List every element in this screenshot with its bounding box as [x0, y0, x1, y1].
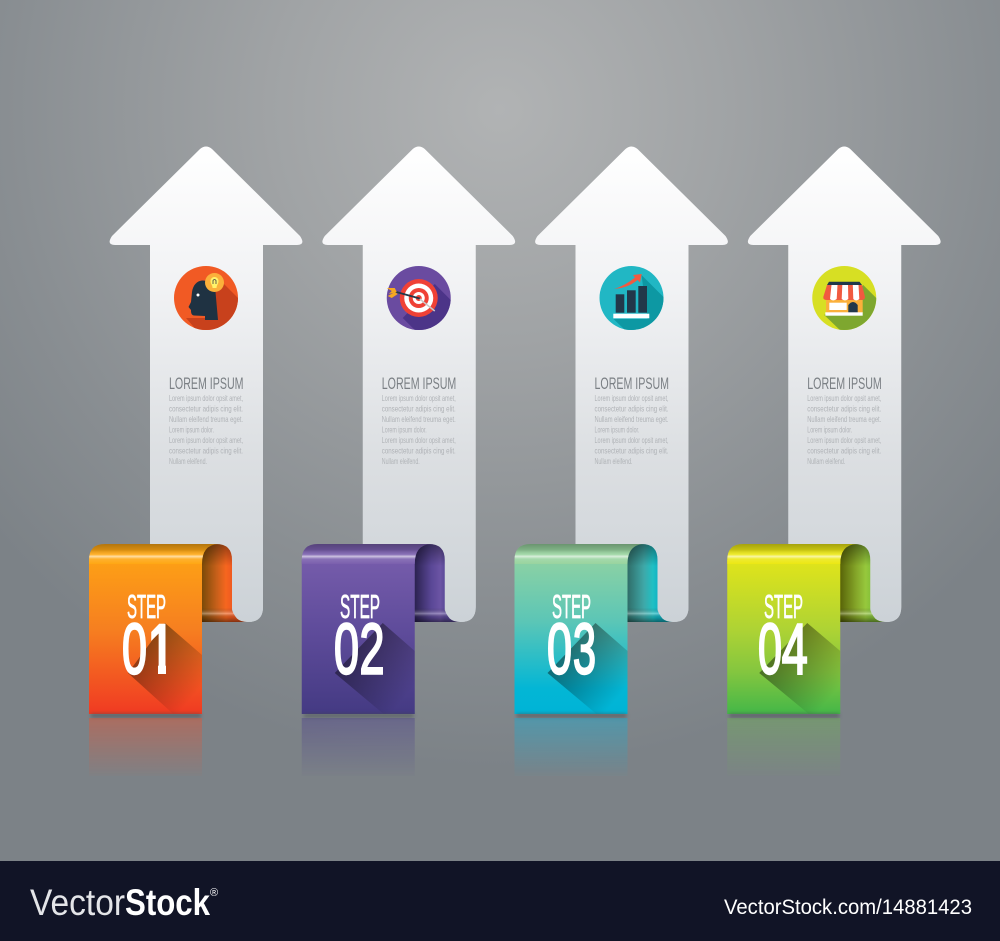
body text: consectetur adipis cing elit. [807, 446, 881, 456]
body text: Lorem ipsum dolor. [594, 424, 640, 434]
step 4 column: STEP [764, 588, 803, 625]
ribbon front [89, 544, 218, 714]
body text: Nullam eleifend treuma eget. [594, 414, 668, 424]
body text: consectetur adipis cing elit. [382, 446, 456, 456]
ribbon front [727, 544, 856, 714]
step number: 1 [148, 610, 174, 690]
heading: LOREM IPSUM [594, 374, 669, 393]
ribbon back fold [828, 544, 901, 622]
arrow 4 [748, 146, 941, 622]
number long shadow [335, 623, 414, 710]
body text: Nullam eleifend treuma eget. [807, 414, 881, 424]
reflection [514, 718, 628, 768]
footer bar [0, 861, 1000, 941]
step number: 0 [547, 610, 572, 690]
heading: LOREM IPSUM [169, 374, 244, 393]
step 3 column: STEP [552, 588, 591, 625]
reflection [89, 718, 202, 769]
ribbon front [514, 544, 644, 714]
arrow 1 [110, 146, 302, 622]
step 4 column [727, 146, 941, 776]
body text: consectetur adipis cing elit. [807, 404, 881, 414]
reflection [727, 718, 840, 756]
body text: Lorem ipsum dolor. [169, 424, 214, 434]
step 1 column [89, 146, 302, 776]
heading: LOREM IPSUM [382, 374, 456, 393]
footer logo: VectorStock [30, 882, 210, 923]
step number: 3 [573, 610, 596, 690]
icon: shop storefront [812, 266, 876, 330]
body text: Lorem ipsum dolor. [807, 424, 852, 434]
body text: Nullam eleifend treuma eget. [169, 414, 243, 424]
ribbon shadow [516, 714, 626, 718]
body text [382, 393, 456, 466]
step 3 column [514, 146, 728, 776]
heading: LOREM IPSUM [807, 374, 882, 393]
body text: Lorem ipsum dolor opsit amet, [382, 435, 456, 445]
ribbon shadow [304, 714, 414, 718]
ribbon shadow [729, 714, 839, 718]
body text: consectetur adipis cing elit. [594, 446, 668, 456]
body text: Lorem ipsum dolor opsit amet, [169, 435, 243, 445]
step number [123, 622, 166, 676]
step number: 4 [782, 610, 808, 690]
step number: 0 [758, 610, 782, 690]
icon: target with dart [386, 266, 451, 330]
step 1 column: STEP [127, 588, 166, 625]
number long shadow [548, 623, 628, 712]
body text: consectetur adipis cing elit. [169, 404, 243, 414]
body text: Nullam eleifend. [382, 456, 420, 466]
icon: head with light bulb [174, 266, 238, 330]
body text: Nullam eleifend treuma eget. [382, 414, 456, 424]
step 2 column [302, 146, 515, 776]
number long shadow [759, 623, 840, 712]
body text: Nullam eleifend. [807, 456, 845, 466]
registered mark: ® [210, 887, 218, 899]
ribbon back fold [616, 544, 688, 622]
body text: Nullam eleifend. [169, 456, 207, 466]
body text: Lorem ipsum dolor opsit amet, [807, 435, 881, 445]
ribbon shadow [91, 714, 201, 718]
body text: Lorem ipsum dolor opsit amet, [169, 393, 243, 403]
arrow 2 [322, 146, 515, 622]
ribbon front [302, 544, 431, 714]
body text: consectetur adipis cing elit. [169, 446, 243, 456]
footer url: VectorStock.com/14881423 [724, 896, 972, 919]
body text: consectetur adipis cing elit. [382, 404, 456, 414]
body text [594, 393, 668, 466]
body text: Lorem ipsum dolor opsit amet, [807, 393, 881, 403]
ribbon back fold [403, 544, 476, 622]
body text: Nullam eleifend. [594, 456, 632, 466]
step number: 0 [122, 610, 147, 690]
body text: Lorem ipsum dolor. [382, 424, 427, 434]
body text [169, 393, 243, 466]
arrow 3 [535, 146, 728, 622]
number long shadow [128, 623, 202, 712]
icon: bar chart with rising arrow [600, 266, 664, 330]
body text: Lorem ipsum dolor opsit amet, [382, 393, 456, 403]
reflection [302, 718, 415, 762]
step number: 2 [360, 610, 384, 690]
step number: 0 [334, 610, 359, 690]
body text [807, 393, 881, 466]
step 2 column: STEP [340, 588, 380, 625]
body text: Lorem ipsum dolor opsit amet, [594, 435, 668, 445]
body text: consectetur adipis cing elit. [594, 404, 668, 414]
body text: Lorem ipsum dolor opsit amet, [594, 393, 668, 403]
ribbon back fold [190, 544, 263, 622]
